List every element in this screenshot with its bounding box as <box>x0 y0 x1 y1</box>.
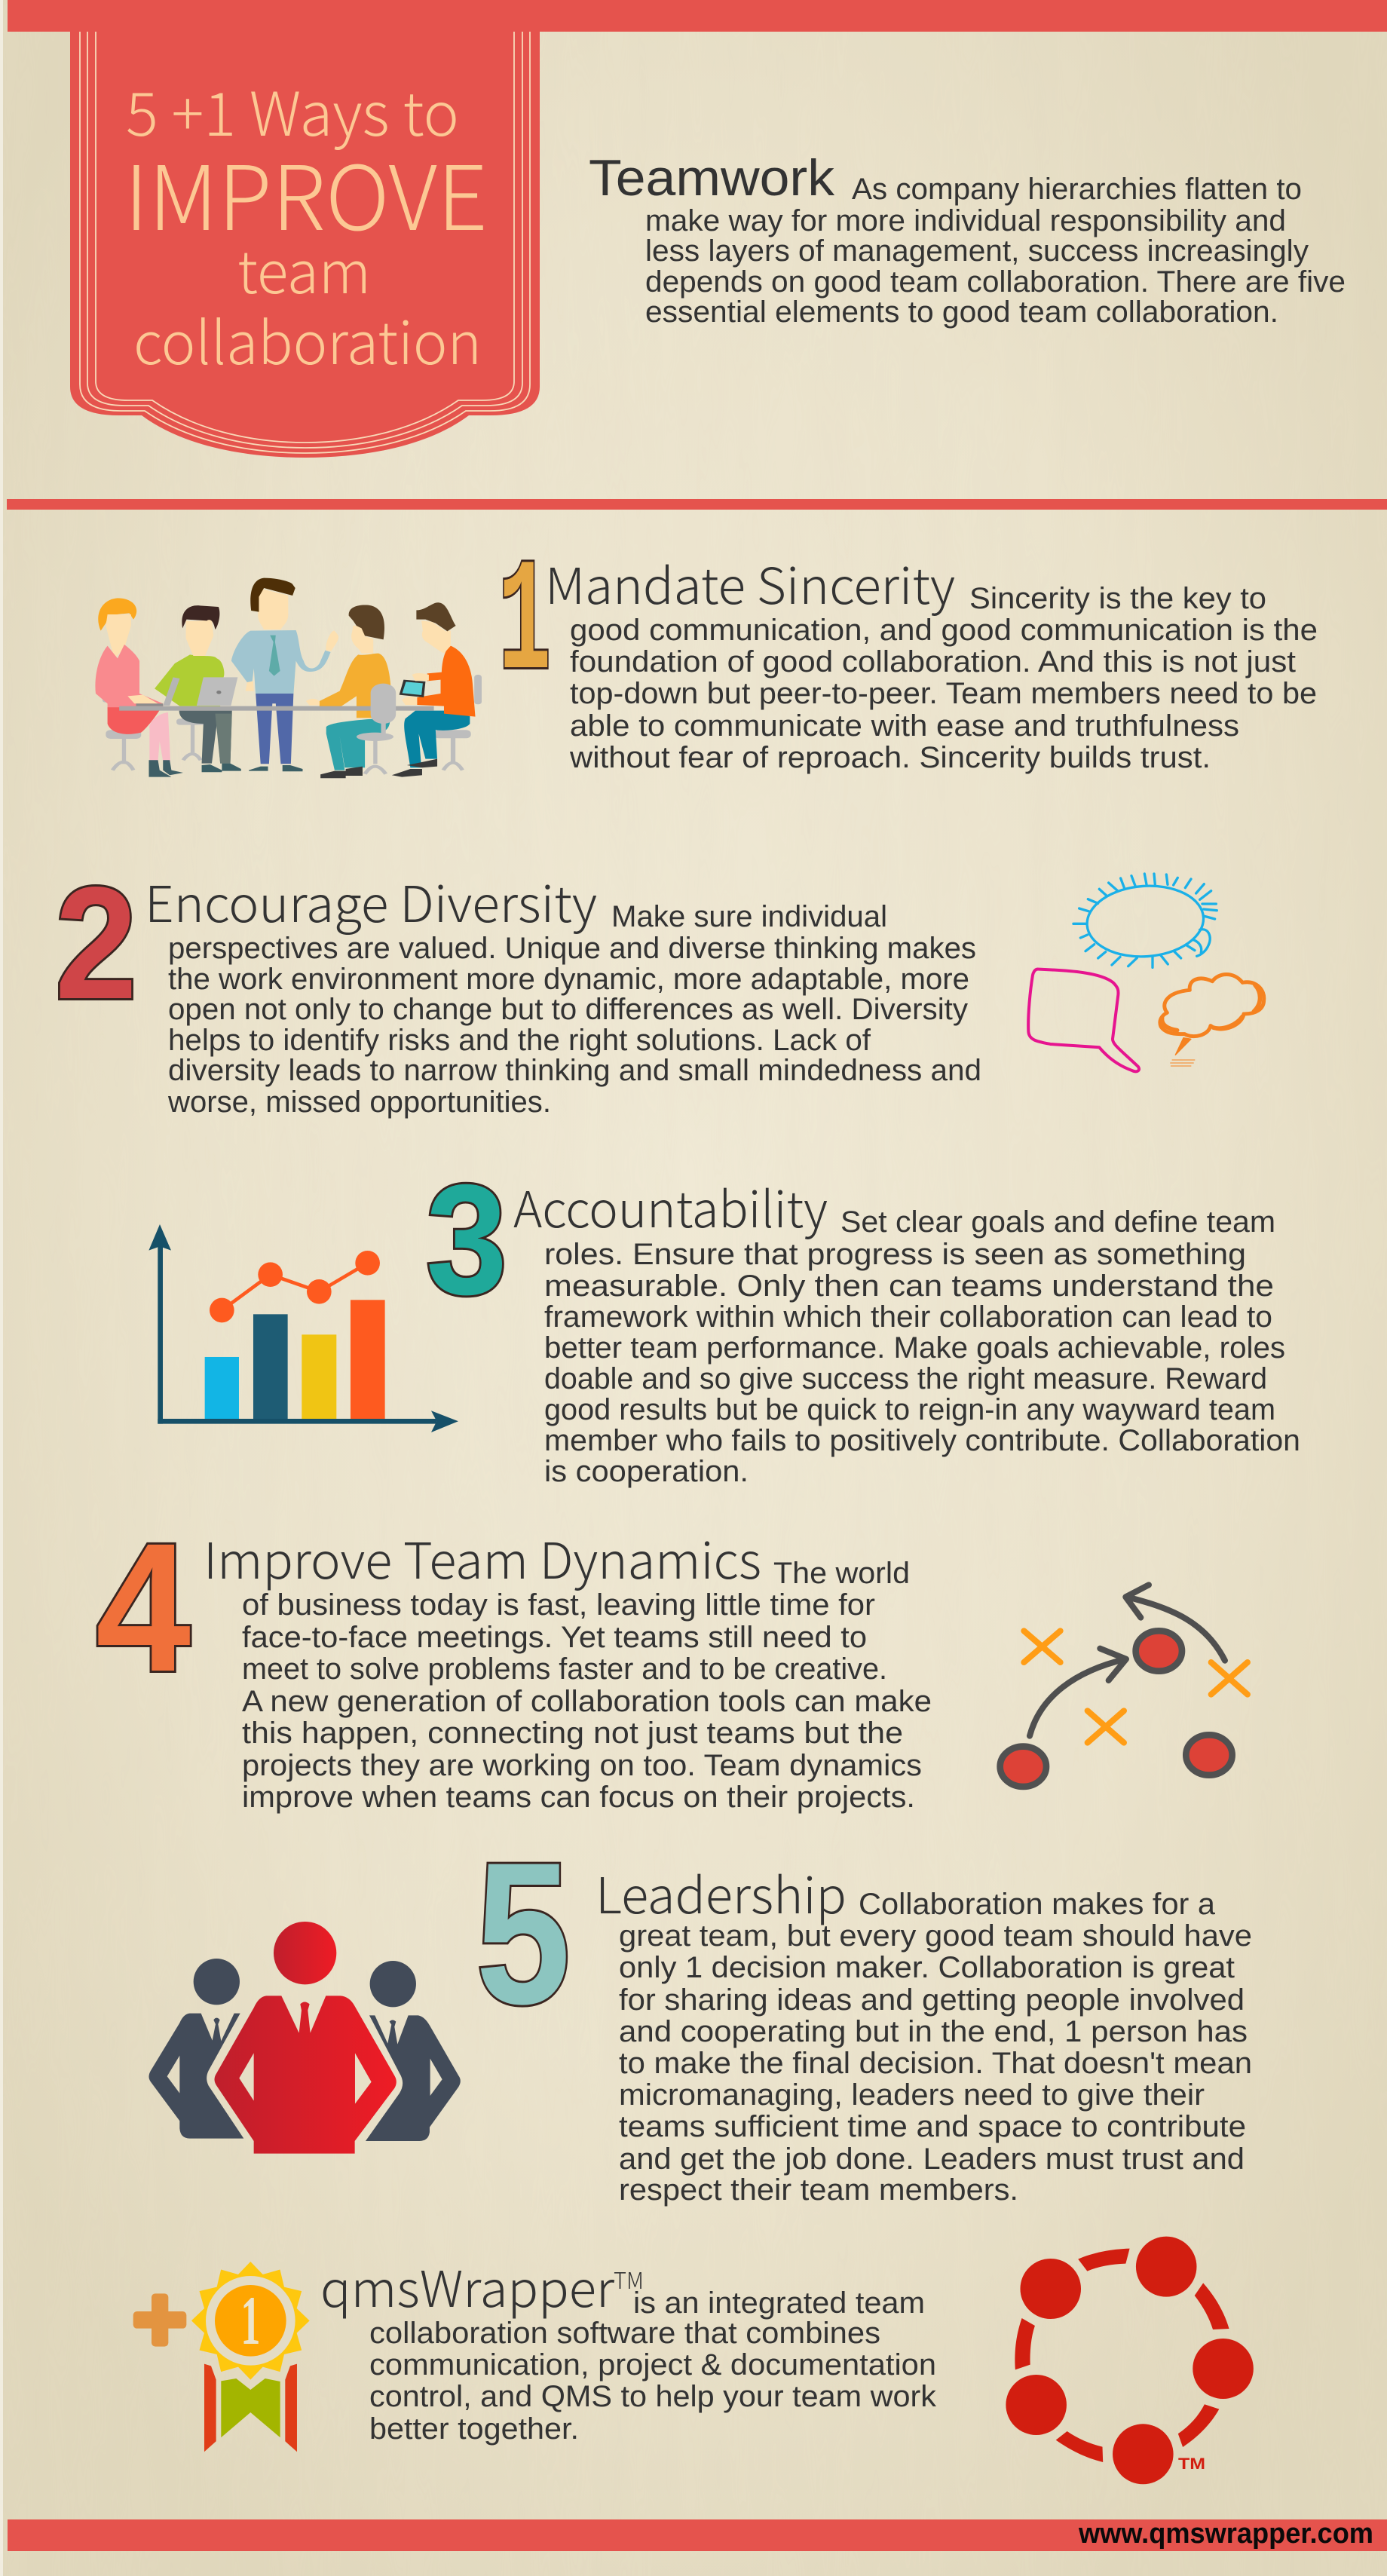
heading and body: projects they are working on too. Team dynamics <box>242 1749 922 1782</box>
heading and body <box>545 547 1318 774</box>
section 6: qmsWrapper: control, and QMS to help your team work <box>369 2380 937 2413</box>
heading and body: Mandate Sincerity <box>545 547 955 619</box>
heading and body: top-down but peer-to-peer. Team members need to be <box>570 677 1317 710</box>
section 6: qmsWrapper: qmsWrapper <box>320 2250 614 2322</box>
text block: teamwork intro: essential elements to good team collaboration. <box>645 296 1278 329</box>
heading and body <box>596 1856 1252 2207</box>
heading and body: respect their team members. <box>619 2173 1018 2207</box>
heading and body: and cooperating but in the end, 1 person has <box>619 2015 1248 2048</box>
heading and body: open not only to change but to differences as well. Diversity <box>168 993 968 1026</box>
heading and body: Accountability <box>513 1170 828 1242</box>
section 6: qmsWrapper: TM <box>614 2262 644 2296</box>
text block: teamwork intro: make way for more individual responsibility and <box>645 204 1286 237</box>
section 6: qmsWrapper: is an integrated team <box>633 2287 925 2320</box>
icon: plus and award ribbon <box>133 2262 310 2452</box>
icon: speech bubbles <box>1028 874 1264 1071</box>
section 4: improve team dynamics <box>96 1505 932 1814</box>
heading and body: diversity leads to narrow thinking and small mindedness and <box>168 1054 981 1087</box>
heading and body: face-to-face meetings. Yet teams still need to <box>242 1621 867 1654</box>
icon: qmsWrapper logo <box>1006 2237 1254 2484</box>
heading and body: the work environment more dynamic, more adaptable, more <box>168 963 969 996</box>
footer bar with url <box>8 2518 1387 2551</box>
heading and body: this happen, connecting not just teams but the <box>242 1717 903 1750</box>
heading and body: framework within which their collaboration can lead to <box>544 1300 1272 1334</box>
section 2: encourage diversity <box>55 853 981 1119</box>
divider bar <box>7 499 1387 510</box>
heading and body: able to communicate with ease and truthfulness <box>570 709 1239 743</box>
heading and body: helps to identify risks and the right solutions. Lack of <box>168 1024 871 1057</box>
number 4: 4 <box>96 1505 191 1710</box>
icon: leader with team <box>148 1922 461 2154</box>
section 1: mandate sincerity <box>498 534 1318 774</box>
heading and body <box>145 865 981 1119</box>
heading and body: Leadership <box>596 1856 847 1928</box>
heading and body: Collaboration makes for a <box>859 1888 1216 1921</box>
heading and body: meet to solve problems faster and to be creative. <box>242 1652 887 1686</box>
footer bar with url: www.qmswrapper.com <box>1078 2518 1373 2550</box>
text block: teamwork intro: depends on good team collaboration. There are five <box>645 265 1346 299</box>
heading and body: good communication, and good communication is the <box>570 614 1318 647</box>
heading and body: is cooperation. <box>544 1455 749 1488</box>
text block: teamwork intro <box>589 149 1346 329</box>
text block: teamwork intro: Teamwork <box>589 149 835 207</box>
heading and body: for sharing ideas and getting people involved <box>619 1983 1245 2017</box>
heading and body: Sincerity is the key to <box>969 582 1266 615</box>
title text: collaboration <box>133 297 482 381</box>
heading and body: Improve Team Dynamics <box>204 1521 761 1594</box>
heading and body: micromanaging, leaders need to give their <box>619 2078 1205 2112</box>
blue bubble <box>1073 874 1217 967</box>
heading and body: teams sufficient time and space to contribute <box>619 2110 1246 2143</box>
icon: qmsWrapper logo: TM <box>1178 2455 1205 2473</box>
heading and body: to make the final decision. That doesn't mean <box>619 2047 1252 2080</box>
heading and body: only 1 decision maker. Collaboration is great <box>619 1951 1235 1984</box>
number 2: 2 <box>55 853 137 1032</box>
heading and body: member who fails to positively contribute. Collaboration <box>544 1424 1300 1457</box>
number 1: 1 <box>498 534 551 715</box>
text block: teamwork intro: less layers of management, success increasingly <box>645 234 1309 268</box>
icon: bar and line chart <box>148 1224 458 1432</box>
title text: 5 +1 Ways to <box>126 66 459 154</box>
number 3: 3 <box>426 1153 507 1328</box>
orange cloud bubble <box>1160 974 1264 1066</box>
heading and body: improve when teams can focus on their projects. <box>242 1781 915 1814</box>
heading and body: worse, missed opportunities. <box>167 1086 551 1119</box>
heading and body: good results but be quick to reign-in any wayward team <box>544 1393 1275 1426</box>
section 6: qmsWrapper: better together. <box>369 2412 579 2446</box>
heading and body: foundation of good collaboration. And this is not just <box>570 645 1296 678</box>
pink bubble <box>1028 969 1139 1071</box>
panel: title banner <box>70 32 540 458</box>
section 6: qmsWrapper <box>320 2250 937 2446</box>
heading and body: measurable. Only then can teams understand the <box>544 1270 1274 1303</box>
title text: IMPROVE <box>124 127 488 256</box>
heading and body: better team performance. Make goals achievable, roles <box>544 1331 1285 1365</box>
heading and body: Set clear goals and define team <box>840 1205 1275 1239</box>
heading and body: doable and so give success the right measure. Reward <box>544 1362 1267 1395</box>
heading and body: roles. Ensure that progress is seen as something <box>544 1238 1246 1271</box>
section 6: qmsWrapper: collaboration software that combines <box>369 2317 880 2350</box>
top red bar <box>8 0 1387 32</box>
text block: teamwork intro: As company hierarchies flatten to <box>852 173 1302 206</box>
heading and body: of business today is fast, leaving little time for <box>242 1588 875 1622</box>
title text: team <box>237 226 371 311</box>
heading and body <box>513 1170 1300 1488</box>
heading and body: great team, but every good team should have <box>619 1919 1252 1953</box>
number 5: 5 <box>476 1820 571 2046</box>
icon: team meeting illustration <box>95 578 482 778</box>
heading and body <box>204 1521 932 1814</box>
heading and body: and get the job done. Leaders must trust and <box>619 2143 1245 2176</box>
heading and body: Encourage Diversity <box>145 865 597 937</box>
title text <box>124 66 488 381</box>
section 5: leadership <box>476 1820 1252 2207</box>
section 3: accountability <box>426 1153 1300 1488</box>
heading and body: perspectives are valued. Unique and diverse thinking makes <box>168 932 976 965</box>
heading and body: without fear of reproach. Sincerity builds trust. <box>569 741 1211 774</box>
icon: team play diagram <box>1000 1585 1248 1787</box>
heading and body: Make sure individual <box>611 900 887 933</box>
section 6: qmsWrapper: communication, project & documentation <box>369 2348 936 2381</box>
heading and body: The world <box>773 1557 910 1590</box>
icon: plus and award ribbon: 1 <box>240 2282 260 2359</box>
heading and body: A new generation of collaboration tools can make <box>242 1685 932 1718</box>
